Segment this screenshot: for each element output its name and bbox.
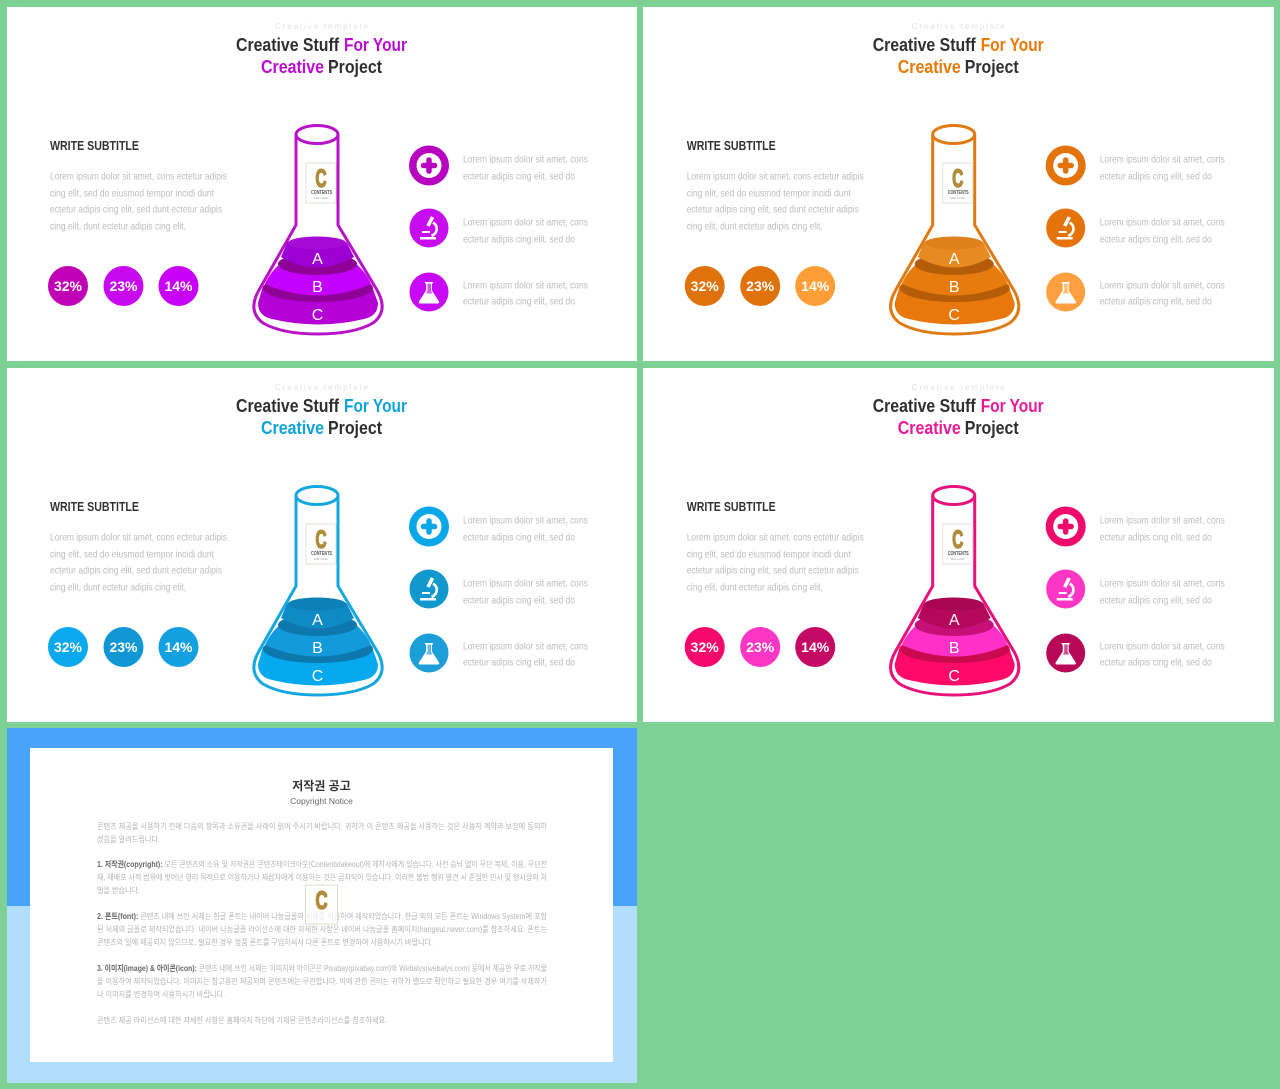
- icon: microscope: [410, 570, 448, 608]
- text: item one: ectetur adipis cing elit, sed do: [1100, 532, 1212, 544]
- paragraph 2: 콘텐츠의 일에 제공되지 않으므로, 필요한 경우 정품 폰트를 구입하셔서 다른 폰트로 변경하여 사용하시기 바랍니다.: [97, 937, 433, 947]
- percentage badges: 23%: [746, 639, 775, 655]
- paragraph 3: [97, 963, 547, 999]
- logo: [306, 524, 336, 564]
- text block: description: Lorem ipsum dolor sit amet, cons ectetur adipis: [50, 532, 227, 544]
- text: item three: Lorem ipsum dolor sit amet, cons: [463, 640, 588, 652]
- flask chart: [891, 486, 1019, 695]
- layer A: [918, 236, 991, 268]
- icon: plus: [1046, 146, 1086, 186]
- layer B: B: [949, 640, 960, 657]
- panel: pink slide: [643, 368, 1274, 722]
- layer A: A: [949, 251, 960, 268]
- logo: CONTENTS: [311, 551, 333, 557]
- paragraph 3: 3. 이미지(image) & 아이콘(icon): 콘텐츠 내에 쓰인 서체는 이미지와 아이콘은 Pixabay(pixabay.com)와 Webalys(webalys.com) 등에서 제공한 무료 저작물: [97, 963, 547, 973]
- logo: CONTENTS: [948, 551, 969, 557]
- layer B: [265, 253, 371, 296]
- text block: description: Lorem ipsum dolor sit amet, cons ectetur adipis: [50, 170, 227, 182]
- text: item two: [1100, 216, 1225, 246]
- text: item two: [1100, 578, 1225, 606]
- percentage badges: 32%: [54, 639, 83, 655]
- percentage badges: 14%: [164, 278, 193, 294]
- icon: microscope: [1046, 208, 1085, 248]
- title: Creative: [261, 57, 324, 77]
- paragraph 1: 1. 저작권(copyright): 모든 콘텐츠의 소유 및 저작권은 콘텐츠테이크아웃(Contentstakeout)에 제작사에게 있습니다. 사전 승낙 없이 무단 복제, 이용, 무단전: [97, 859, 547, 869]
- logo: WAL LOOK: [951, 196, 965, 200]
- percentage badges: [685, 627, 835, 667]
- layer B: B: [312, 640, 323, 657]
- title: For Your: [981, 35, 1044, 55]
- text block: description: [687, 170, 864, 232]
- text: item one: Lorem ipsum dolor sit amet, cons: [463, 514, 588, 526]
- percentage badges: 14%: [801, 278, 830, 294]
- percentage badges: 23%: [746, 278, 775, 294]
- text: item one: [463, 154, 588, 182]
- logo: C: [952, 526, 963, 554]
- title: [236, 35, 407, 77]
- percentage badges: 14%: [164, 639, 193, 655]
- paragraph 3: 을 이용하여 제작되었습니다. 이미지는 참고용만 제공되며 콘텐츠에는 무관합니다. 이에 관한 권리는 귀하가 별도로 확인하고 필요한 경우 여기를 삭제하거: [97, 976, 547, 986]
- layer B: [902, 253, 1008, 296]
- icon: plus: [409, 506, 449, 546]
- text: item three: Lorem ipsum dolor sit amet, cons: [1100, 280, 1225, 292]
- text: item three: [463, 280, 588, 308]
- text: item three: ectetur adipis cing elit, sed do: [1100, 656, 1212, 668]
- text: item one: [1100, 514, 1225, 544]
- logo watermark: C: [316, 887, 328, 915]
- title: Creative Stuff: [873, 396, 977, 416]
- layer C: C: [948, 668, 960, 685]
- heading: copyright: 저작권 공고: [292, 778, 351, 793]
- paragraph 3: 나 이미지를 변경하여 사용하시기 바랍니다.: [97, 989, 225, 999]
- small heading: Creative template: [275, 22, 369, 31]
- closing line: 콘텐츠 제공 라이선스에 대한 자세한 사항은 홈페이지 하단에 기재된 콘텐츠라이선스를 참조하세요.: [97, 1015, 387, 1025]
- paragraph 2: [97, 911, 548, 947]
- text: item three: Lorem ipsum dolor sit amet, cons: [1100, 640, 1225, 652]
- percentage badges: 14%: [801, 639, 830, 655]
- text: item three: ectetur adipis cing elit, sed do: [463, 296, 575, 308]
- icon: plus: [409, 146, 449, 186]
- text block: description: cing elit, sed do eiusmod tempor incidi dunt: [50, 548, 214, 560]
- text: item one: Lorem ipsum dolor sit amet, cons: [463, 154, 588, 166]
- layer C: C: [312, 307, 323, 324]
- layer C: [258, 635, 378, 686]
- title: Creative Stuff: [236, 396, 340, 416]
- layer C: [895, 274, 1015, 324]
- logo: [306, 163, 336, 203]
- text block: description: cing elit, sed do eiusmod tempor incidi dunt: [50, 188, 214, 200]
- layer B: B: [312, 279, 323, 296]
- text: item one: [1100, 154, 1225, 182]
- logo: CONTENTS: [311, 190, 333, 196]
- title: Project: [328, 57, 382, 77]
- icon: microscope: [410, 208, 448, 248]
- text block: description: [50, 532, 227, 594]
- icon: microscope: [1046, 570, 1085, 608]
- text: item two: ectetur adipis cing elit, sed do: [1100, 594, 1212, 606]
- title: [236, 396, 407, 438]
- percentage badges: [48, 627, 198, 667]
- logo: WAL LOOK: [314, 557, 328, 561]
- text: item three: Lorem ipsum dolor sit amet, cons: [463, 280, 588, 292]
- layer A: [918, 598, 991, 629]
- layer B: [265, 614, 371, 657]
- flask chart: [254, 126, 382, 334]
- icon: flask: [1046, 272, 1085, 312]
- logo watermark: [306, 885, 338, 924]
- percentage badges: 32%: [691, 639, 719, 655]
- panel: purple slide: [7, 7, 637, 361]
- percentage badges: [685, 266, 835, 306]
- logo: CONTENTS: [948, 190, 969, 196]
- text: item three: ectetur adipis cing elit, sed do: [463, 656, 575, 668]
- layer B: B: [949, 279, 960, 296]
- icon: flask: [410, 272, 448, 312]
- text: item one: ectetur adipis cing elit, sed do: [463, 170, 575, 182]
- percentage badges: 23%: [109, 278, 138, 294]
- text: item two: Lorem ipsum dolor sit amet, cons: [463, 216, 588, 228]
- text: item one: ectetur adipis cing elit, sed do: [463, 532, 575, 544]
- text: item two: ectetur adipis cing elit, sed do: [463, 234, 575, 246]
- text: item two: Lorem ipsum dolor sit amet, cons: [1100, 216, 1225, 228]
- logo: WAL LOOK: [951, 557, 965, 561]
- layer A: A: [312, 251, 323, 268]
- title: For Your: [344, 35, 407, 55]
- text: item one: [463, 514, 588, 544]
- logo: C: [316, 165, 326, 193]
- text: item three: [1100, 640, 1225, 668]
- paragraph 1: 벌을 받습니다.: [97, 885, 140, 895]
- text: item two: ectetur adipis cing elit, sed do: [1100, 234, 1212, 246]
- layer A: A: [949, 612, 960, 629]
- text block: description: cing elit, dunt ectetur adipis cing elit,: [687, 582, 823, 594]
- title: [873, 396, 1044, 438]
- paragraph 2: 2. 폰트(font): 콘텐츠 내에 쓰인 서체는 한글 폰트는 네이버 나눔글꼴의 서체를 이용하여 제작되었습니다. 한글 외의 모든 폰트는 Windows System에 포함: [97, 911, 548, 921]
- logo: C: [952, 165, 963, 193]
- title: Project: [965, 57, 1019, 77]
- text: item three: [463, 640, 588, 668]
- layer A: A: [312, 612, 323, 629]
- title: For Your: [981, 396, 1044, 416]
- text: item three: ectetur adipis cing elit, sed do: [1100, 296, 1212, 308]
- text: item two: Lorem ipsum dolor sit amet, cons: [1100, 578, 1225, 590]
- percentage badges: [48, 266, 198, 306]
- logo: [943, 524, 973, 564]
- text block: description: cing elit, dunt ectetur adipis cing elit,: [50, 582, 186, 594]
- percentage badges: 23%: [109, 639, 138, 655]
- title: Creative Stuff: [236, 35, 340, 55]
- title: Creative: [898, 418, 961, 438]
- panel: orange slide: [643, 7, 1274, 361]
- text block: description: ectetur adipis cing elit, sed dunt ectetur adipis: [50, 204, 222, 216]
- text: item one: Lorem ipsum dolor sit amet, cons: [1100, 154, 1225, 166]
- paragraph 1: [97, 859, 547, 895]
- icon: flask: [410, 634, 448, 672]
- text: item two: Lorem ipsum dolor sit amet, cons: [463, 578, 588, 590]
- paragraph 2: 된 서체의 글꼴로 제작되었습니다. 네이버 나눔글꼴 라이선스에 대한 자세한 사항은 네이버 나눔글꼴 홈페이지(hangeul.naver.com)를 참조하세요. 폰트는: [97, 924, 547, 934]
- text block: description: Lorem ipsum dolor sit amet, cons ectetur adipis: [687, 532, 864, 544]
- text block: description: cing elit, sed do eiusmod tempor incidi dunt: [687, 548, 851, 560]
- icon: plus: [1046, 506, 1086, 546]
- logo: [943, 163, 973, 203]
- panel: blue slide: [7, 368, 637, 722]
- title: Project: [328, 418, 382, 438]
- text block: description: cing elit, dunt ectetur adipis cing elit,: [50, 220, 186, 232]
- text block: description: cing elit, dunt ectetur adipis cing elit,: [687, 220, 823, 232]
- text: item two: [463, 578, 588, 606]
- small heading: Creative template: [912, 383, 1005, 392]
- title: Creative Stuff: [873, 35, 977, 55]
- icon: flask: [1046, 634, 1085, 672]
- layer A: [281, 236, 354, 268]
- subtitle: WRITE SUBTITLE: [50, 139, 139, 153]
- text: item one: Lorem ipsum dolor sit amet, cons: [1100, 514, 1225, 526]
- title: [873, 35, 1044, 77]
- layer B: [902, 614, 1008, 657]
- text block: description: Lorem ipsum dolor sit amet, cons ectetur adipis: [687, 170, 864, 182]
- flask chart: [254, 486, 382, 695]
- intro paragraph: 셨음을 알려드립니다.: [97, 834, 160, 844]
- logo: C: [316, 526, 326, 554]
- title: Creative: [261, 418, 324, 438]
- logo: WAL LOOK: [314, 196, 328, 200]
- layer C: [258, 274, 378, 324]
- intro paragraph: [97, 821, 548, 844]
- paragraph 1: 재, 재배포 사적 범위에 벗어난 영리 목적으로 이용하거나 제삼자에게 이용하는 것은 금지되어 있습니다. 이러한 불법 행위 발견 시 준엄한 민사 및 형사상의 처: [97, 872, 547, 882]
- layer A: [281, 598, 354, 629]
- subtitle: WRITE SUBTITLE: [50, 500, 139, 514]
- flask chart: [891, 126, 1019, 334]
- text: item two: [463, 216, 588, 246]
- panel: copyright notice: [7, 728, 637, 1083]
- text: item two: ectetur adipis cing elit, sed do: [463, 594, 575, 606]
- layer C: C: [312, 668, 323, 685]
- subtitle: WRITE SUBTITLE: [687, 139, 776, 153]
- intro paragraph: 콘텐츠 제공을 사용하기 전에 다음의 항목과 소유권을 사례이 읽어 주시기 바랍니다. 귀하가 이 콘텐츠 제공을 사용하는 것은 사용자 계약과 보장에 동의하: [97, 821, 548, 831]
- title: Creative: [898, 57, 961, 77]
- small heading: Creative template: [912, 22, 1005, 31]
- percentage badges: 32%: [54, 278, 83, 294]
- text block: description: [50, 170, 227, 232]
- text block: description: ectetur adipis cing elit, sed dunt ectetur adipis: [687, 204, 859, 216]
- text block: description: cing elit, sed do eiusmod tempor incidi dunt: [687, 188, 851, 200]
- small heading: Creative template: [275, 383, 369, 392]
- title: For Your: [344, 396, 407, 416]
- text: item three: [1100, 280, 1225, 308]
- text block: description: ectetur adipis cing elit, sed dunt ectetur adipis: [50, 564, 222, 576]
- subheading: copyright notice: Copyright Notice: [290, 796, 353, 806]
- text: item one: ectetur adipis cing elit, sed do: [1100, 170, 1212, 182]
- layer C: [895, 635, 1015, 686]
- percentage badges: 32%: [691, 278, 719, 294]
- subtitle: WRITE SUBTITLE: [687, 500, 776, 514]
- text block: description: ectetur adipis cing elit, sed dunt ectetur adipis: [687, 564, 859, 576]
- title: Project: [965, 418, 1019, 438]
- text block: description: [687, 532, 864, 594]
- layer C: C: [948, 307, 960, 324]
